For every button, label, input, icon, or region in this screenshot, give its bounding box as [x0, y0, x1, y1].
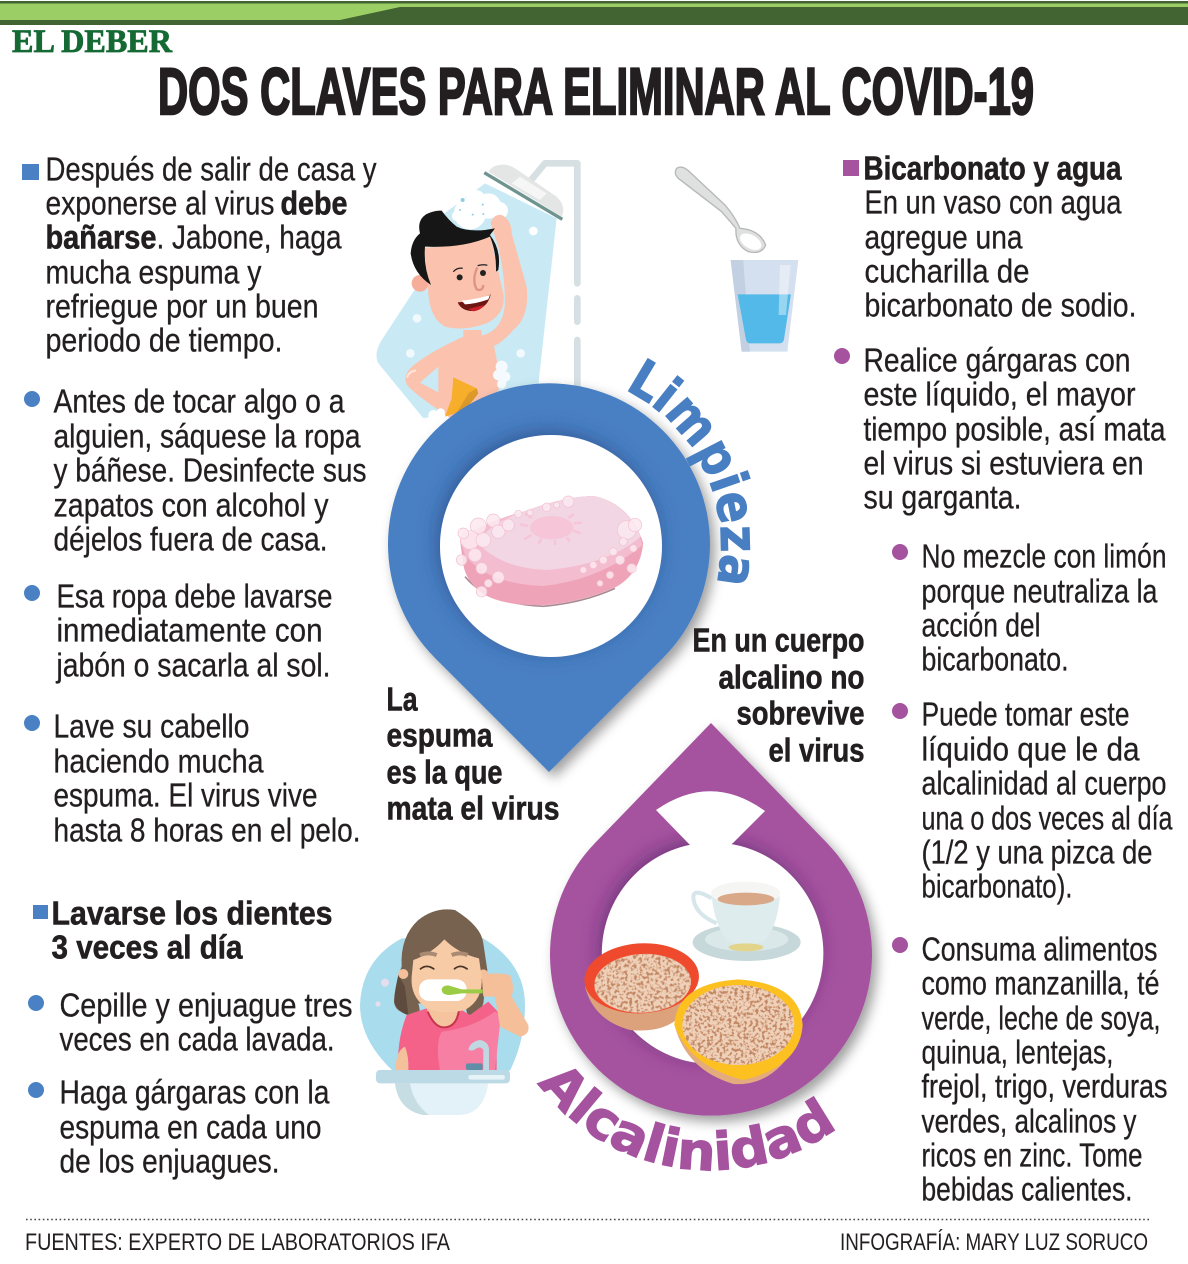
sources credit: FUENTES: EXPERTO DE LABORATORIOS IFA — [25, 1229, 450, 1256]
text block: gargle foam: Haga gárgaras con la — [60, 1074, 330, 1111]
text block: before touching: alguien, sáquese la ropa — [54, 418, 361, 455]
man figure — [405, 190, 527, 420]
text block: after leaving home: Después de salir de casa y — [46, 151, 377, 188]
text block: after leaving home: refriegue por un buen — [46, 288, 318, 325]
pin: Limpieza — [388, 383, 710, 772]
text block: no lemon: bicarbonato. — [922, 641, 1068, 678]
text block: wash hair: espuma. El virus vive — [54, 777, 318, 814]
text block: gargle foam — [28, 1074, 330, 1180]
text block: gargle foam: de los enjuagues. — [60, 1143, 280, 1180]
text block: before touching — [24, 383, 366, 558]
illustration: spoon and glass of water — [675, 167, 798, 352]
text block: bicarbonate and water: Bicarbonato y agua — [864, 150, 1122, 187]
heading: brush teeth: Lavarse los dientes — [52, 895, 332, 932]
text block: brush and rinse — [28, 987, 352, 1058]
text block: no lemon — [892, 538, 1166, 678]
text block: before touching: zapatos con alcohol y — [54, 487, 329, 524]
drop: Alcalinidad — [550, 723, 872, 1116]
shower water and fixture — [376, 163, 577, 418]
callout: alkaline body: alcalino no — [718, 659, 864, 696]
text block: gargle: el virus si estuviera en — [864, 445, 1144, 482]
text block: brush and rinse: veces en cada lavada. — [60, 1021, 334, 1058]
text block: after leaving home: periodo de tiempo. — [46, 322, 282, 359]
text block: gargle — [834, 342, 1166, 516]
text block: wash hair: haciendo mucha — [54, 743, 264, 780]
heading: brush teeth — [33, 895, 332, 966]
text block: bicarbonate and water: cucharilla de — [864, 253, 1030, 290]
text block: gargle: este líquido, el mayor — [864, 376, 1136, 413]
text block: bicarbonate and water: agregue una — [864, 219, 1023, 256]
left column: cleaning advice — [22, 151, 377, 1180]
text block: alkaline foods: verdes, alcalinos y — [922, 1103, 1137, 1140]
text block: before touching: déjelos fuera de casa. — [54, 521, 328, 558]
text block: after leaving home — [22, 151, 377, 359]
footer — [25, 1220, 1150, 1256]
text block: alkaline foods: quinua, lentejas, — [922, 1034, 1114, 1071]
text block: no lemon: acción del — [922, 607, 1040, 644]
illustration: tea cup and bowls — [583, 882, 803, 1084]
callout: alkaline body: sobrevive — [736, 695, 864, 732]
text block: after leaving home: . Jabone, haga — [156, 219, 342, 256]
text block: bicarbonate and water — [843, 150, 1136, 324]
illustration: girl brushing teeth — [360, 909, 529, 1115]
text block: wash hair: Lave su cabello — [54, 708, 250, 745]
text block: wash hair: hasta 8 horas en el pelo. — [54, 812, 360, 849]
header band — [0, 1, 1188, 25]
callout: alkaline body: el virus — [768, 732, 864, 769]
text block: drink the liquid: Puede tomar este — [922, 696, 1130, 733]
text block: drink the liquid: líquido que le da — [922, 731, 1140, 768]
curved label: Alcalinidad: Alcalinidad — [536, 1068, 836, 1172]
text block: bicarbonate and water: En un vaso con agua — [864, 184, 1122, 221]
text block: drink the liquid: bicarbonato). — [922, 868, 1072, 905]
callout: foam kills the virus — [386, 681, 560, 827]
text block: brush and rinse: Cepille y enjuague tres — [60, 987, 352, 1024]
text block: before touching: Antes de tocar algo o a — [54, 383, 345, 420]
callout: alkaline body: En un cuerpo — [692, 622, 864, 659]
callout: foam kills the virus: es la que — [386, 754, 502, 791]
text block: drink the liquid — [892, 696, 1173, 905]
text block: gargle: Realice gárgaras con — [864, 342, 1130, 379]
callout: foam kills the virus: mata el virus — [386, 790, 560, 827]
callout: alkaline body — [692, 622, 864, 769]
icon: bar of soap — [456, 496, 643, 606]
text block: alkaline foods — [892, 931, 1168, 1208]
text block: wash clothes: jabón o sacarla al sol. — [56, 647, 331, 684]
text block: alkaline foods: bebidas calientes. — [922, 1171, 1132, 1208]
text block: after leaving home: debe — [280, 185, 348, 222]
text block: wash clothes — [24, 578, 332, 684]
callout: foam kills the virus: La — [386, 681, 418, 718]
text block: bicarbonate and water: bicarbonato de sodio. — [864, 287, 1136, 324]
text block: wash hair — [24, 708, 360, 849]
illustration: man showering — [376, 163, 577, 420]
callout: foam kills the virus: espuma — [386, 717, 493, 754]
logo: El Deber: EL DEBER — [12, 24, 173, 60]
text block: after leaving home: bañarse — [46, 219, 156, 256]
text block: wash clothes: inmediatamente con — [56, 612, 322, 649]
text block: before touching: y báñese. Desinfecte sus — [54, 452, 366, 489]
text block: wash clothes: Esa ropa debe lavarse — [56, 578, 332, 615]
text block: gargle foam: espuma en cada uno — [60, 1109, 322, 1146]
heading: brush teeth: 3 veces al día — [52, 929, 243, 966]
text block: after leaving home: mucha espuma y — [46, 254, 262, 291]
curved label: Limpieza: Limpieza — [628, 358, 751, 583]
text block: gargle: su garganta. — [864, 479, 1022, 516]
right column: alkalinity advice — [834, 150, 1173, 1208]
text block: after leaving home: exponerse al virus — [46, 185, 274, 222]
